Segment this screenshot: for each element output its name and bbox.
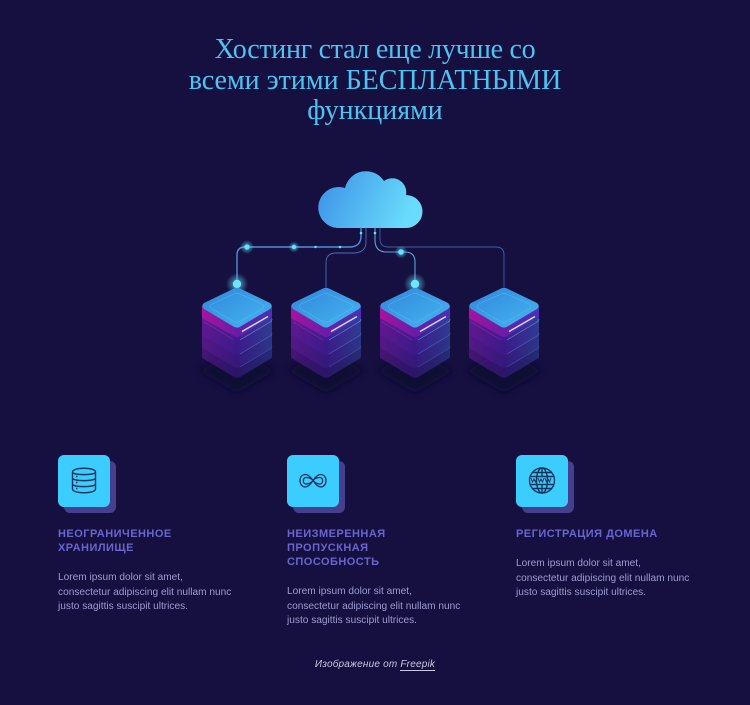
icon: infinity (287, 455, 345, 513)
body text: justo sagittis suscipit ultrices. (287, 615, 417, 626)
server 4 (466, 288, 542, 393)
body text: Lorem ipsum dolor sit amet, (287, 586, 412, 597)
body text: justo sagittis suscipit ultrices. (58, 601, 188, 612)
heading: ПРОПУСКНАЯ (287, 542, 369, 554)
heading: РЕГИСТРАЦИЯ ДОМЕНА (516, 528, 658, 540)
heading: НЕИЗМЕРЕННАЯ (287, 528, 386, 540)
body text: Lorem ipsum dolor sit amet, (58, 572, 183, 583)
feature: storage (58, 455, 231, 612)
title: Хостинг стал еще лучше со (215, 34, 535, 65)
body text: consectetur adipiscing elit nullam nunc (58, 587, 231, 598)
body text (516, 558, 689, 598)
feature: domain (516, 455, 689, 598)
title: всеми этими БЕСПЛАТНЫМИ (189, 65, 561, 96)
body text: consectetur adipiscing elit nullam nunc (516, 573, 689, 584)
server 1 (199, 288, 275, 393)
heading: СПОСОБНОСТЬ (287, 556, 380, 568)
title (189, 34, 561, 126)
body text: consectetur adipiscing elit nullam nunc (287, 601, 460, 612)
server 2 (288, 288, 364, 393)
title: функциями (307, 95, 443, 126)
illustration: cloud connected to four servers (202, 171, 540, 392)
connector lines (237, 228, 504, 287)
cloud (318, 171, 423, 228)
heading: НЕОГРАНИЧЕННОЕ (58, 528, 172, 540)
heading (58, 528, 172, 554)
icon: www globe (516, 455, 574, 513)
heading (287, 528, 386, 568)
server 3 (377, 288, 453, 393)
feature: bandwidth (286, 455, 460, 626)
body text: Lorem ipsum dolor sit amet, (516, 558, 641, 569)
body text: justo sagittis suscipit ultrices. (516, 587, 646, 598)
heading: ХРАНИЛИЩЕ (58, 542, 134, 554)
icon: database (58, 455, 116, 513)
image credit: Изображение от Freepik (315, 659, 435, 670)
body text (286, 586, 460, 626)
body text (58, 572, 231, 612)
connector nodes (226, 232, 426, 295)
